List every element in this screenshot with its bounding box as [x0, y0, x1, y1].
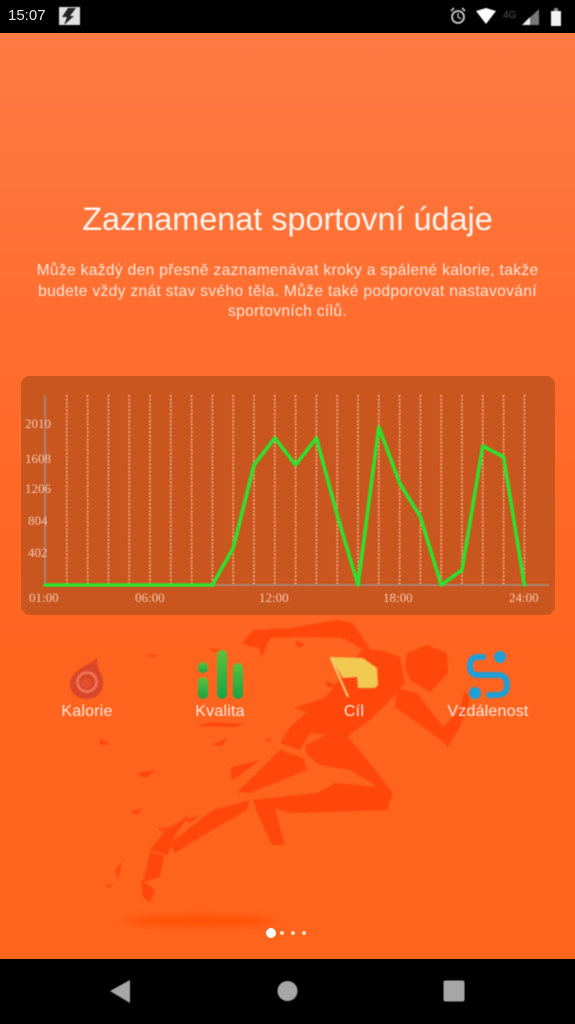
label: Vzdálenost: Vzdálenost	[447, 703, 529, 720]
line chart: 2010	[25, 416, 51, 431]
line chart: 01:00	[29, 590, 59, 605]
line chart: 12:00	[259, 590, 289, 605]
title: Zaznamenat sportovní údaje	[82, 201, 493, 237]
icon: bars	[198, 650, 243, 699]
label: Cíl: Cíl	[344, 703, 364, 720]
icon: flag	[330, 657, 378, 697]
line chart: 804	[28, 513, 48, 528]
back button	[110, 980, 130, 1003]
line chart: 402	[28, 545, 48, 560]
status icons: 4G	[503, 10, 517, 21]
status icons	[58, 6, 562, 27]
navigation bar	[0, 959, 575, 1024]
recents button	[444, 980, 464, 1002]
line chart: 18:00	[383, 590, 413, 605]
icon: distance S	[469, 651, 507, 699]
line chart: 1608	[25, 451, 51, 466]
line chart: 24:00	[509, 590, 539, 605]
panel: chart	[21, 376, 555, 615]
label: Kalorie: Kalorie	[61, 703, 113, 720]
line chart: 06:00	[135, 590, 165, 605]
intro text: sportovních cílů.	[228, 303, 347, 320]
intro text: budete vždy znát stav svého těla. Může také podporovat nastavování	[38, 282, 537, 300]
label: Kvalita: Kvalita	[195, 703, 245, 720]
clock: 15:07	[8, 7, 46, 24]
icon: flame	[70, 657, 103, 699]
line chart: 1206	[25, 481, 52, 496]
intro text: Může každý den přesně zaznamenávat kroky a spálené kalorie, takže	[37, 262, 538, 279]
home button	[278, 981, 298, 1001]
status bar	[0, 0, 575, 33]
intro text	[37, 262, 538, 320]
